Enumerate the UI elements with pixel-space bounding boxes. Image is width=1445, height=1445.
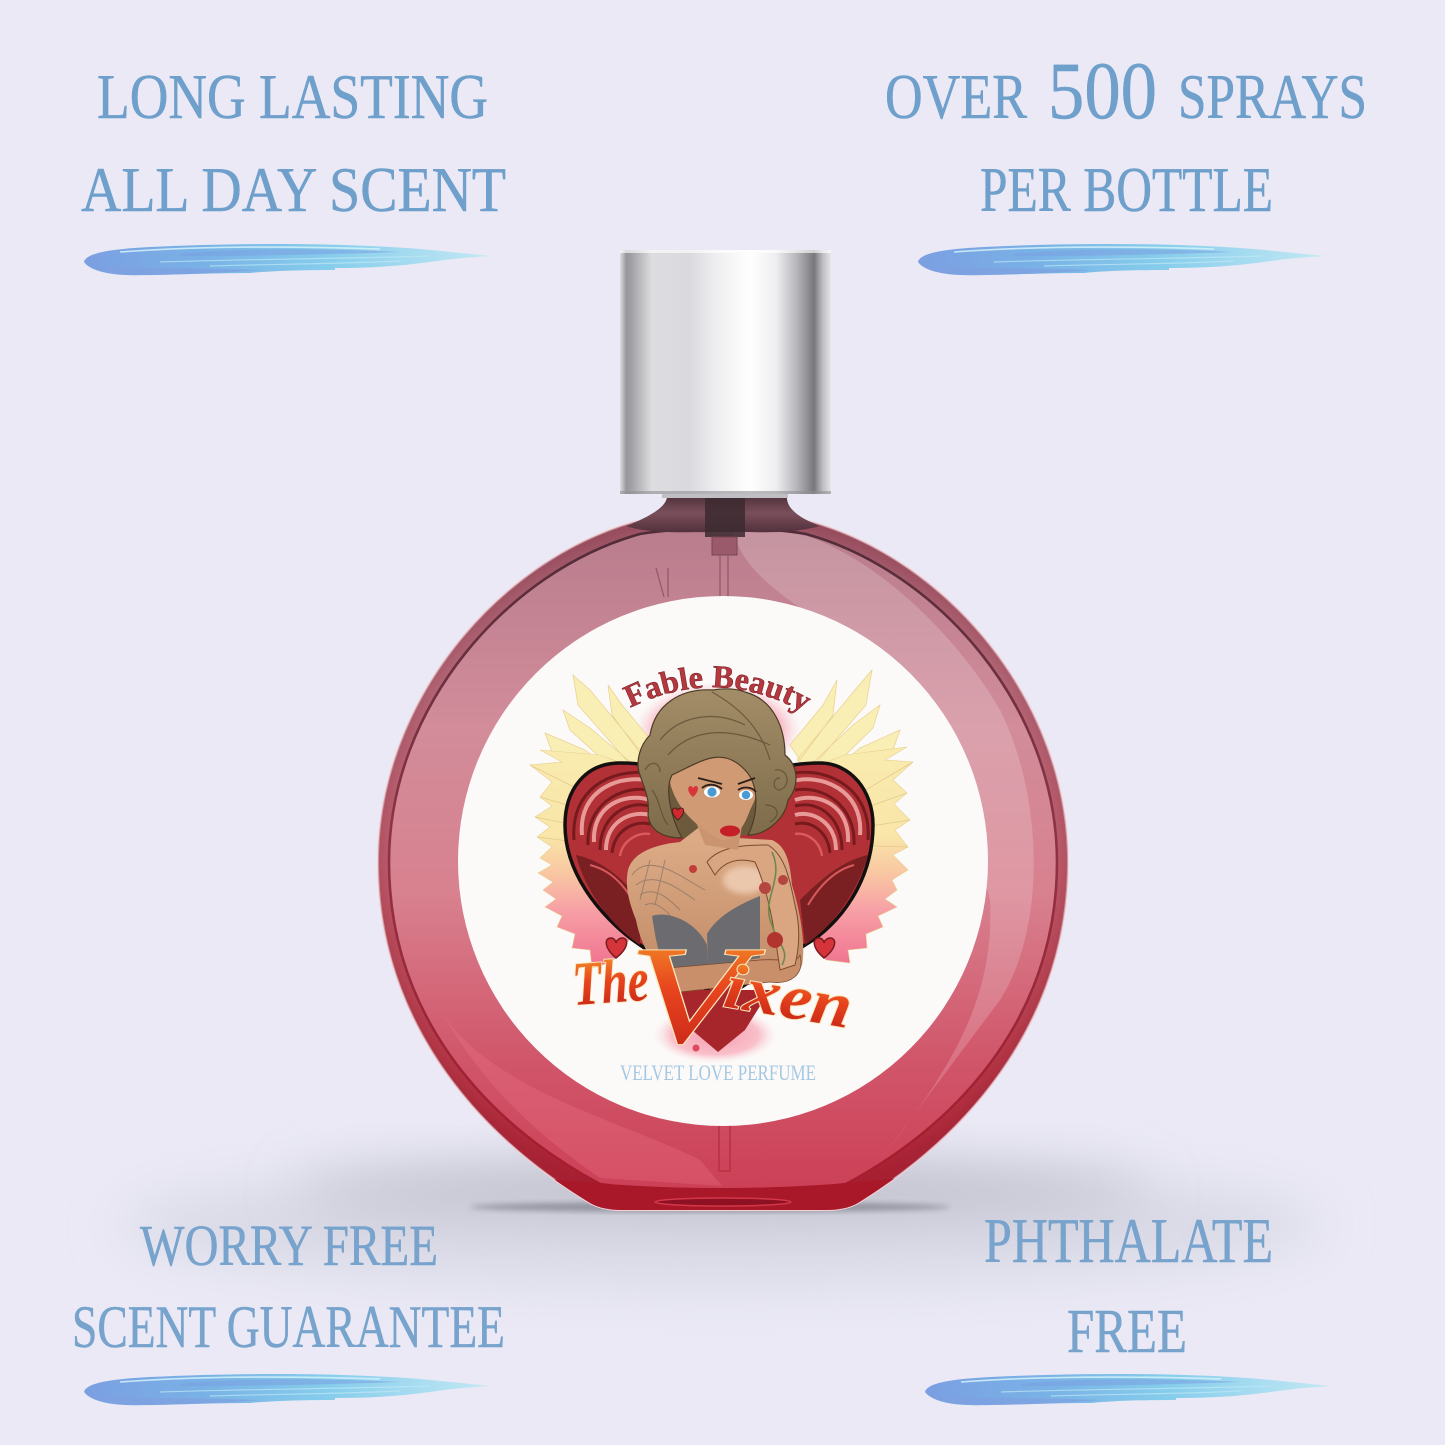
heading line 2: SCENT GUARANTEE xyxy=(72,1294,505,1360)
heading line 1: 500 xyxy=(1048,45,1157,136)
torso xyxy=(627,828,803,990)
brush stroke underline xyxy=(84,244,492,275)
brush stroke underline xyxy=(925,1374,1333,1405)
heart frame xyxy=(565,763,873,1000)
wing tattoo xyxy=(632,860,705,915)
feature: phthalate free xyxy=(925,1205,1333,1405)
back hair xyxy=(655,770,780,838)
small hearts xyxy=(606,938,835,958)
brush stroke underline xyxy=(84,1374,492,1405)
face xyxy=(668,756,758,840)
feature: long lasting all day scent xyxy=(81,61,506,275)
product name script: The xyxy=(570,946,651,1019)
hair xyxy=(638,689,796,838)
heading line 1: OVER xyxy=(885,61,1027,132)
chest highlight xyxy=(723,866,767,894)
glass highlight xyxy=(733,531,1034,1160)
rose tattoos xyxy=(689,852,788,965)
label artwork xyxy=(529,666,914,1085)
neck xyxy=(692,812,742,850)
product name script: ixen xyxy=(720,950,858,1042)
bra xyxy=(652,896,760,977)
heading line 1: LONG LASTING xyxy=(97,61,488,132)
round white label xyxy=(458,596,988,1126)
bottom dip tube xyxy=(719,1125,730,1171)
floor shadow xyxy=(122,1165,1322,1285)
perfume name: VELVET LOVE PERFUME xyxy=(620,1060,816,1085)
woman figure xyxy=(627,689,803,992)
pink splash xyxy=(634,682,802,778)
feather lines xyxy=(530,762,913,847)
heading line 1: PHTHALATE xyxy=(984,1205,1273,1276)
bottle neck xyxy=(626,495,820,532)
heading line 2: PER BOTTLE xyxy=(980,154,1273,225)
right wing xyxy=(785,670,913,963)
feature: worry free scent guarantee xyxy=(72,1213,505,1405)
eyes and brows xyxy=(698,778,756,800)
earring heart xyxy=(672,808,684,820)
left wing xyxy=(530,675,660,968)
product name script: V xyxy=(628,918,765,1073)
hand under chin xyxy=(707,845,799,970)
perfume bottle xyxy=(377,250,1069,1211)
hair strands and curls xyxy=(645,692,787,825)
heading line 1: SPRAYS xyxy=(1178,61,1367,132)
brand name: Fable Beauty xyxy=(622,666,811,714)
brush stroke underline xyxy=(918,244,1326,275)
forearm across xyxy=(668,955,801,992)
heading line 2: ALL DAY SCENT xyxy=(81,154,506,225)
feature: over 500 sprays per bottle xyxy=(885,45,1367,275)
silver cap xyxy=(620,250,831,498)
bottle body xyxy=(378,514,1068,1210)
cheek heart xyxy=(688,786,698,797)
lips xyxy=(720,826,740,836)
lower ornament xyxy=(653,990,777,1063)
heading line 2: FREE xyxy=(1067,1298,1187,1366)
pump tube xyxy=(656,497,745,597)
heading line 1: WORRY FREE xyxy=(140,1213,438,1278)
inner glass ring xyxy=(389,529,1057,1192)
bottle base xyxy=(554,1178,894,1210)
product name script xyxy=(570,918,858,1073)
